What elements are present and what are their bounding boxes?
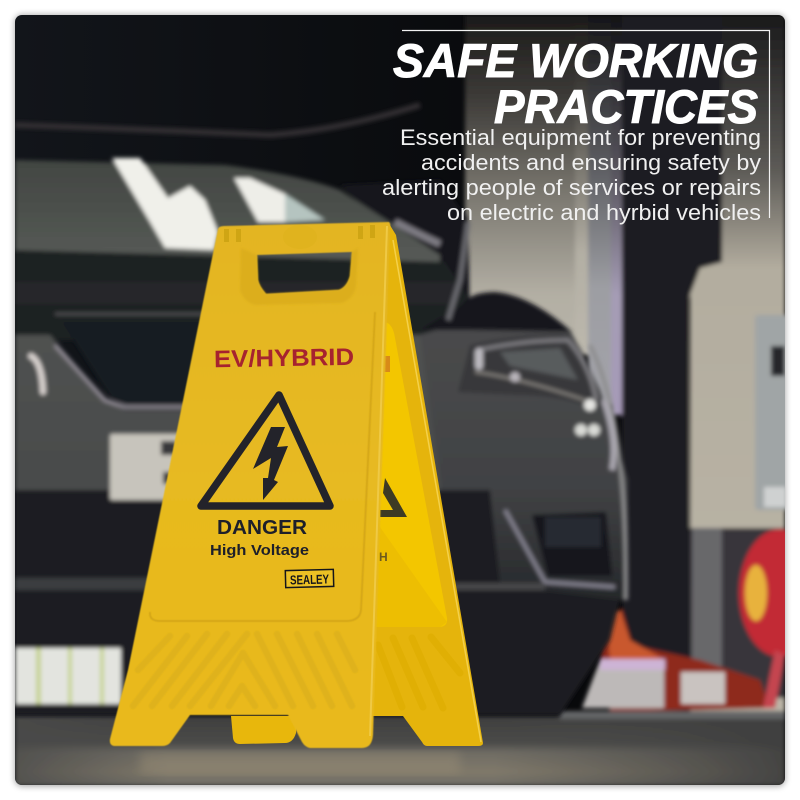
heading line 1: SAFE WORKING xyxy=(393,34,758,87)
machinery behind xyxy=(690,528,785,698)
fender edge xyxy=(590,345,626,600)
blurred car xyxy=(15,105,628,715)
white blocks xyxy=(582,660,664,708)
floor reflection under sign xyxy=(140,752,460,774)
right edge highlight xyxy=(370,226,387,736)
description line 2: accidents and ensuring safety by xyxy=(421,150,761,175)
SEALEY logo: SEALEY xyxy=(290,571,329,588)
warning triangle icon xyxy=(201,395,330,506)
windscreen xyxy=(15,160,440,268)
description text xyxy=(382,125,761,225)
white windows strip xyxy=(15,648,121,704)
right wall xyxy=(690,15,785,720)
heading frame line xyxy=(402,30,770,218)
lower dark bumper xyxy=(15,490,620,715)
licence plate xyxy=(110,434,182,500)
upper grille line xyxy=(55,312,210,316)
top clasp xyxy=(283,225,317,249)
grille xyxy=(76,340,194,406)
back panel inset xyxy=(375,322,447,627)
back panel ribs xyxy=(378,637,460,708)
red stand xyxy=(763,650,785,708)
fender glints xyxy=(584,399,596,411)
roof line xyxy=(15,105,420,135)
headlight bokeh xyxy=(510,372,520,382)
body bumper xyxy=(15,332,443,492)
floor xyxy=(15,716,785,786)
handle recess xyxy=(240,248,358,305)
yellow highlight xyxy=(745,565,767,621)
lightning bolt icon xyxy=(253,427,288,500)
back panel xyxy=(231,222,483,746)
left headlight glint xyxy=(31,356,43,392)
red ball xyxy=(739,529,800,657)
heading line 2: PRACTICES xyxy=(494,80,758,133)
grey wall cabinet xyxy=(754,312,785,512)
DANGER label: DANGER xyxy=(217,517,308,539)
headlight xyxy=(460,334,592,401)
description line 3: alerting people of services or repairs xyxy=(382,175,761,200)
fender xyxy=(436,332,622,600)
back panel triangle fragment xyxy=(380,478,407,517)
back panel foot xyxy=(231,716,296,744)
front ribs xyxy=(133,634,355,706)
back panel edge xyxy=(393,240,481,742)
back panel ev text fragment xyxy=(381,356,390,372)
bay strut xyxy=(448,222,468,320)
steel lift column xyxy=(575,15,623,415)
dark pillar xyxy=(622,15,722,660)
heading xyxy=(393,34,758,133)
High Voltage label: High Voltage xyxy=(210,543,309,559)
hinge clips xyxy=(224,225,375,242)
description line 1: Essential equipment for preventing xyxy=(400,125,761,150)
bay hose xyxy=(395,222,440,244)
front panel xyxy=(110,222,390,748)
windscreen highlights xyxy=(112,158,218,250)
EV/HYBRID label: EV/HYBRID xyxy=(214,344,354,373)
bonnet edge xyxy=(420,292,572,332)
back panel inset shading xyxy=(375,520,447,627)
chrome grille line xyxy=(55,345,205,407)
engine bay xyxy=(340,180,470,340)
warning sign A-board xyxy=(110,222,483,748)
lower chrome trim xyxy=(505,510,615,587)
back panel danger fragment: H xyxy=(379,550,388,564)
bonnet xyxy=(15,250,470,340)
back wall xyxy=(462,15,578,346)
jack body xyxy=(600,610,770,712)
plate edge xyxy=(150,312,375,621)
description line 4: on electric and hyrbid vehicles xyxy=(447,200,761,225)
